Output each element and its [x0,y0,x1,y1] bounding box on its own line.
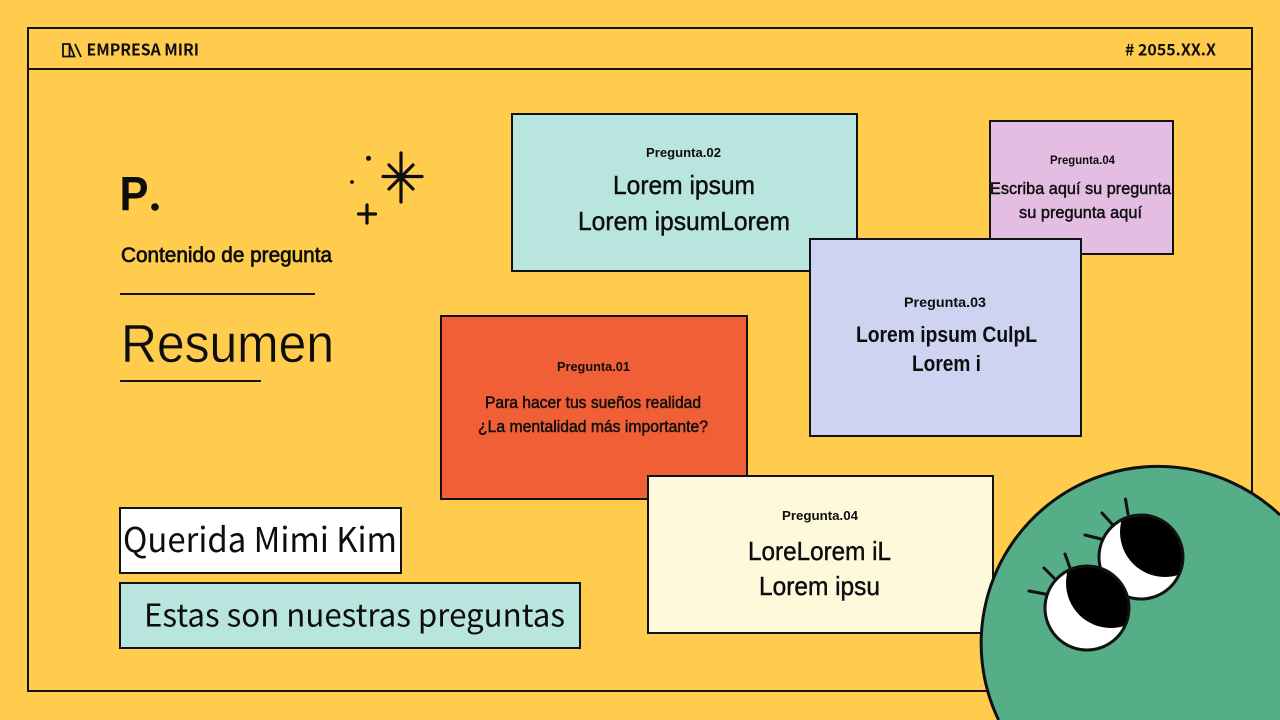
company name: EMPRESA MIRI [86,36,199,60]
panel: pregunta 04 pink: Pregunta.04 [1050,155,1116,167]
label: greeting: Querida Mimi Kim [123,513,397,562]
title underline [120,380,261,382]
heading block [120,168,334,382]
panel: pregunta 02: Lorem ipsum [613,170,755,200]
panel: pregunta 04 cream: LoreLorem iL [748,536,891,566]
icon: sparkles [350,153,422,223]
panel: pregunta 03: Lorem i [912,351,981,376]
panel: pregunta 04 cream: Pregunta.04 [782,509,858,523]
panel: pregunta 04 pink [990,121,1173,254]
label: intro: Estas son nuestras preguntas [144,590,565,636]
subtitle: Contenido de pregunta [121,243,332,267]
panel: pregunta 01 [441,316,747,499]
panel: pregunta 03: Pregunta.03 [904,294,986,310]
header: company logo and name [63,36,199,60]
character: green blob with eyes [981,466,1280,720]
panel: pregunta 02: Pregunta.02 [646,146,721,160]
panel: pregunta 02: Lorem ipsumLorem [578,206,790,236]
panel: pregunta 03 [810,239,1081,436]
panel: pregunta 04 cream: Lorem ipsu [759,571,880,601]
panel: pregunta 01: Pregunta.01 [557,359,630,374]
letter P: P [120,168,148,221]
eye: back [1084,498,1184,600]
dot after P [151,203,159,211]
title: Resumen [121,314,334,374]
eye: front [1028,552,1130,652]
header: document number: # 2055.XX.X [1125,36,1216,60]
panel: pregunta 04 pink: su pregunta aquí [1019,203,1142,222]
label: intro [120,583,580,648]
icon: book logo [63,44,81,57]
panel: pregunta 02 [512,114,857,271]
panel: pregunta 01: ¿La mentalidad más importante? [478,418,708,436]
divider [120,293,315,295]
panel: pregunta 01: Para hacer tus sueños realidad [485,394,701,412]
panel: pregunta 04 pink: Escriba aquí su pregunta [990,179,1172,198]
panel: pregunta 03: Lorem ipsum CulpL [856,322,1037,347]
panel: pregunta 04 cream [648,476,993,633]
